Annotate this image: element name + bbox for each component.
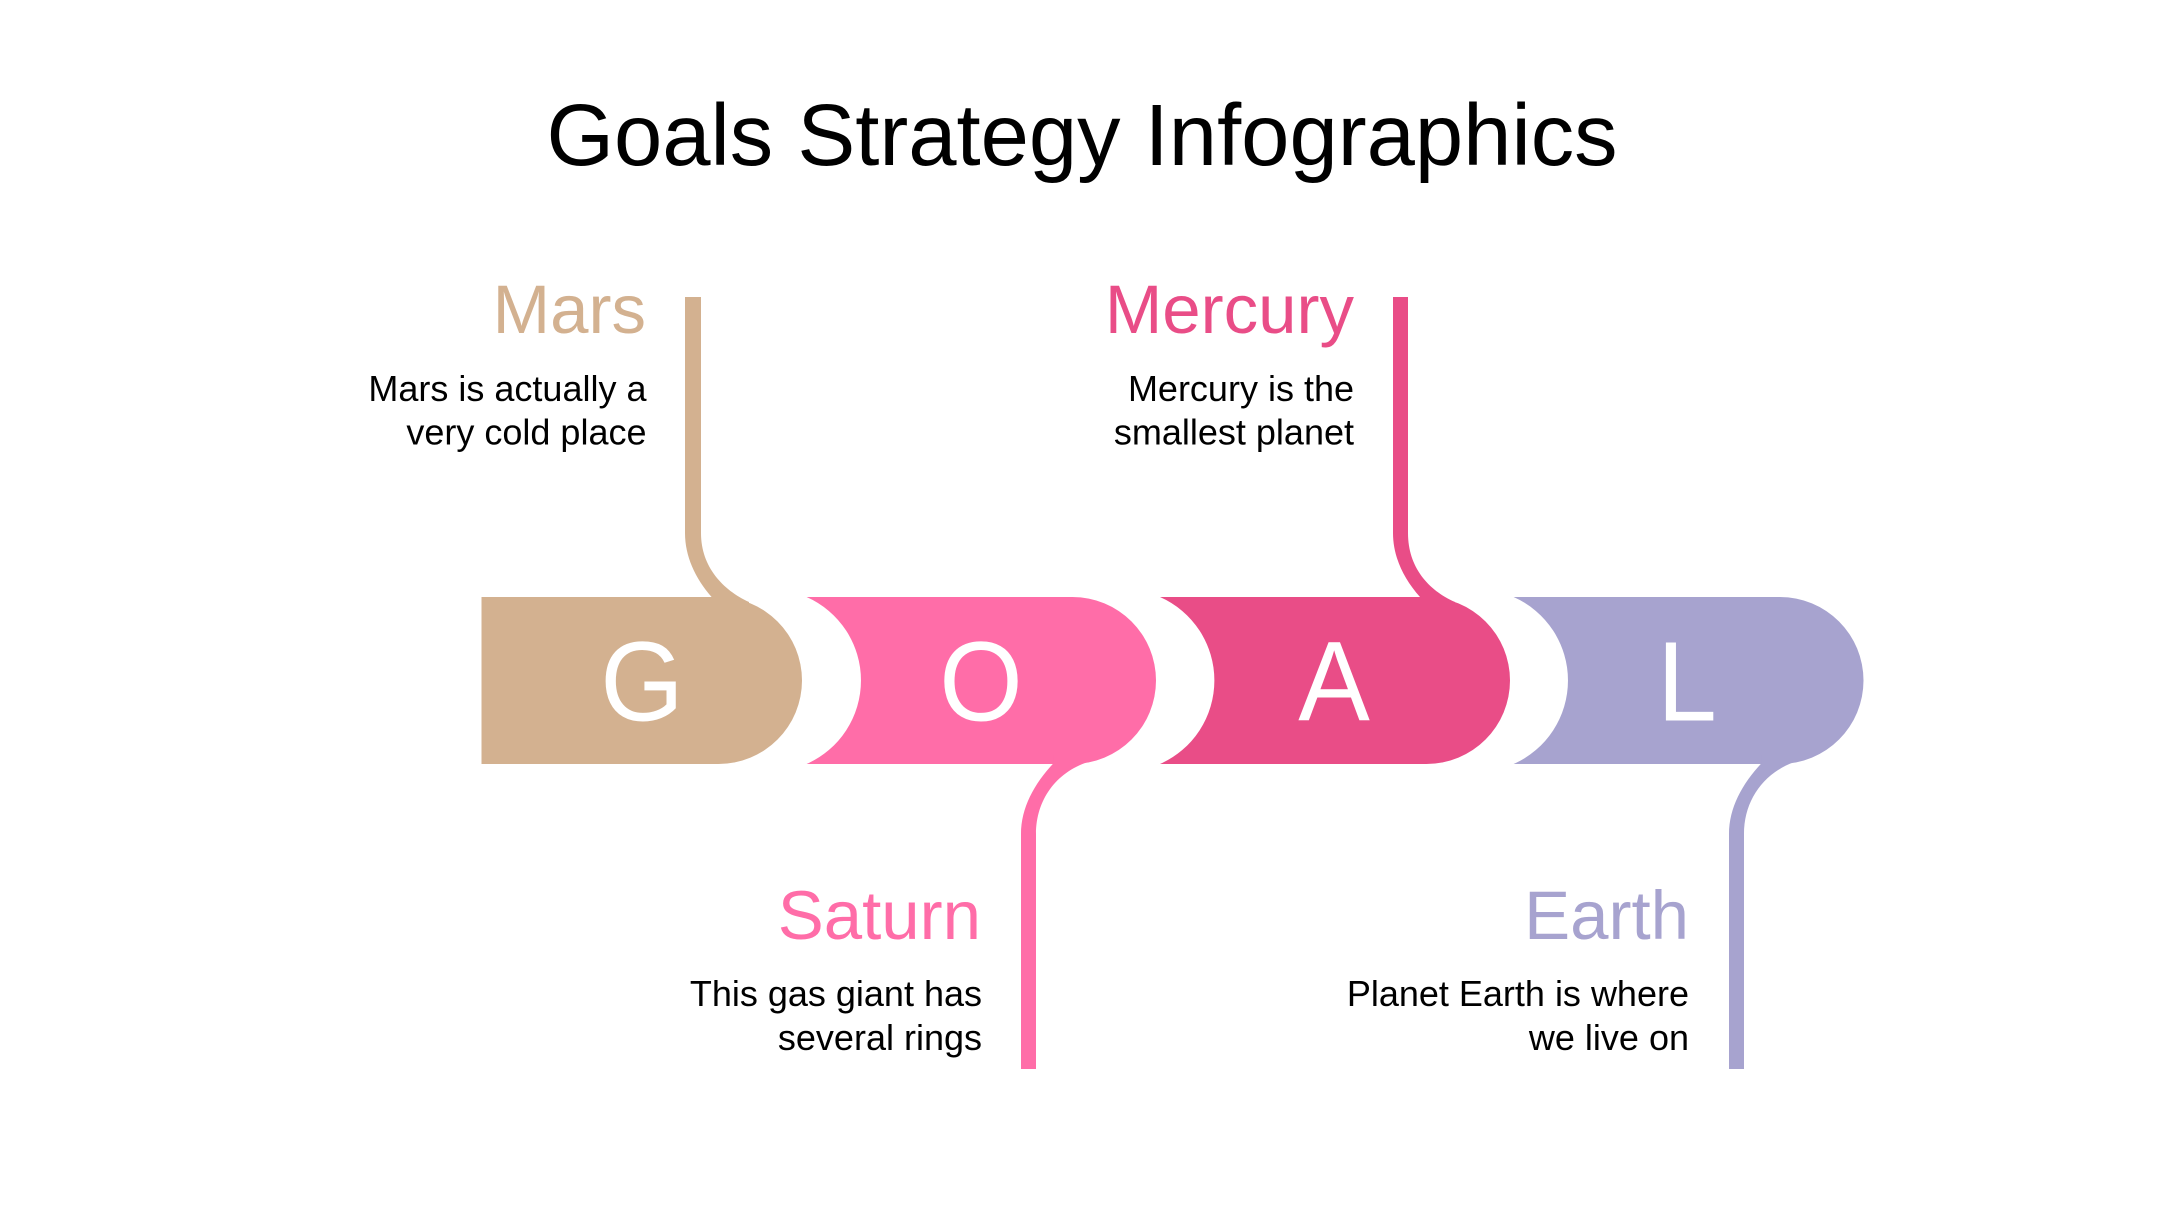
panel: L segment with connector: L	[1657, 619, 1717, 745]
panel: O segment with connector	[807, 597, 1156, 1069]
panel: A segment with connector: A	[1298, 619, 1370, 745]
text block: Saturn: This gas giant has	[690, 973, 982, 1014]
text block: Saturn	[690, 877, 982, 1058]
text block: Mars: Mars	[493, 271, 646, 348]
text block: Earth	[1347, 877, 1689, 1058]
text block: Mercury	[1105, 271, 1354, 452]
panel: A segment with connector	[1160, 297, 1510, 764]
text block: Saturn: several rings	[778, 1017, 982, 1058]
text block: Earth: Planet Earth is where	[1347, 973, 1689, 1014]
text block: Mars: very cold place	[406, 412, 646, 452]
panel: O segment with connector: O	[939, 619, 1023, 745]
title: Goals Strategy Infographics	[546, 87, 1618, 184]
panel: G segment with connector	[482, 297, 802, 764]
panel: L segment with connector	[1514, 597, 1864, 1069]
text block: Mercury: smallest planet	[1114, 412, 1354, 452]
text block: Saturn: Saturn	[778, 877, 981, 954]
text block: Mercury: Mercury is the	[1128, 368, 1354, 409]
text block: Earth: Earth	[1524, 877, 1689, 954]
text block: Mercury: Mercury	[1105, 271, 1354, 348]
text block: Earth: we live on	[1528, 1017, 1689, 1058]
text block: Mars: Mars is actually a	[368, 368, 647, 409]
text block: Mars	[368, 271, 647, 452]
panel: G segment with connector: G	[600, 619, 684, 745]
